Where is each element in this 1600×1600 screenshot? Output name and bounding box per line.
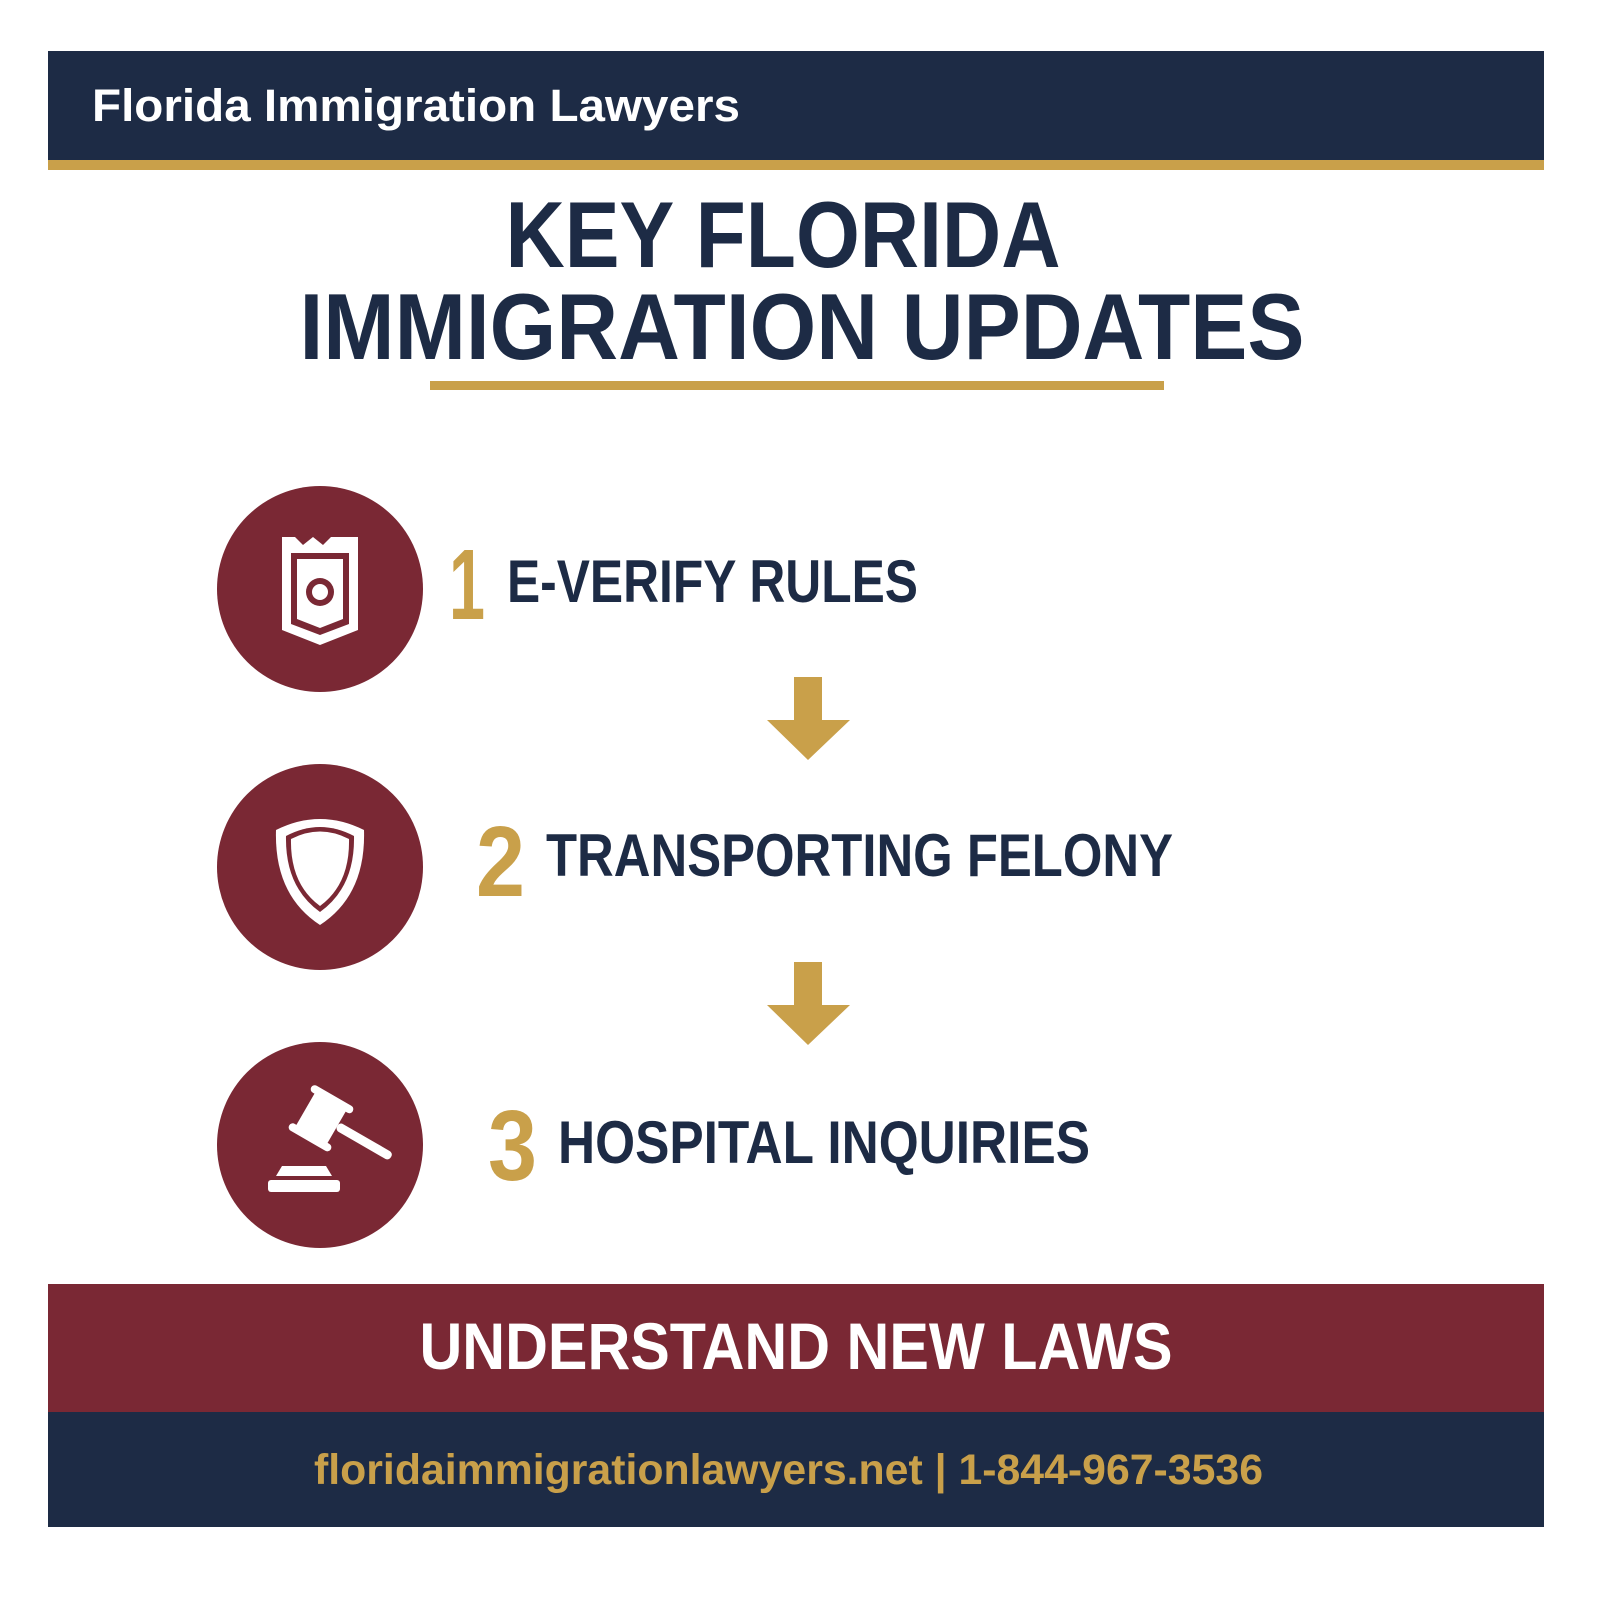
number 2: 2 — [476, 806, 525, 918]
number 1: 1 — [449, 529, 485, 641]
label 2: TRANSPORTING FELONY — [546, 822, 1173, 889]
icon: shield — [217, 764, 423, 970]
footer: contact: floridaimmigrationlawyers.net | 1-844-967-3536 — [314, 1446, 1263, 1494]
title — [300, 182, 1304, 379]
icon: badge — [217, 486, 423, 692]
label 1: E-VERIFY RULES — [507, 548, 918, 615]
title: KEY FLORIDA — [506, 182, 1060, 287]
footer: contact — [48, 1412, 1544, 1527]
header text: Florida Immigration Lawyers — [92, 80, 740, 131]
title underline — [430, 381, 1164, 390]
label 3: HOSPITAL INQUIRIES — [558, 1109, 1090, 1176]
item 1 — [217, 486, 918, 692]
arrow 2 — [767, 962, 850, 1045]
number 3: 3 — [488, 1090, 537, 1202]
banner: understand new laws — [48, 1284, 1544, 1413]
arrow 1 — [767, 677, 850, 760]
item 2 — [217, 764, 1173, 970]
item 3 — [217, 1042, 1090, 1248]
title: IMMIGRATION UPDATES — [300, 274, 1304, 379]
icon: gavel — [217, 1042, 423, 1248]
banner: understand new laws: UNDERSTAND NEW LAWS — [420, 1309, 1172, 1383]
header bar — [48, 51, 1544, 170]
